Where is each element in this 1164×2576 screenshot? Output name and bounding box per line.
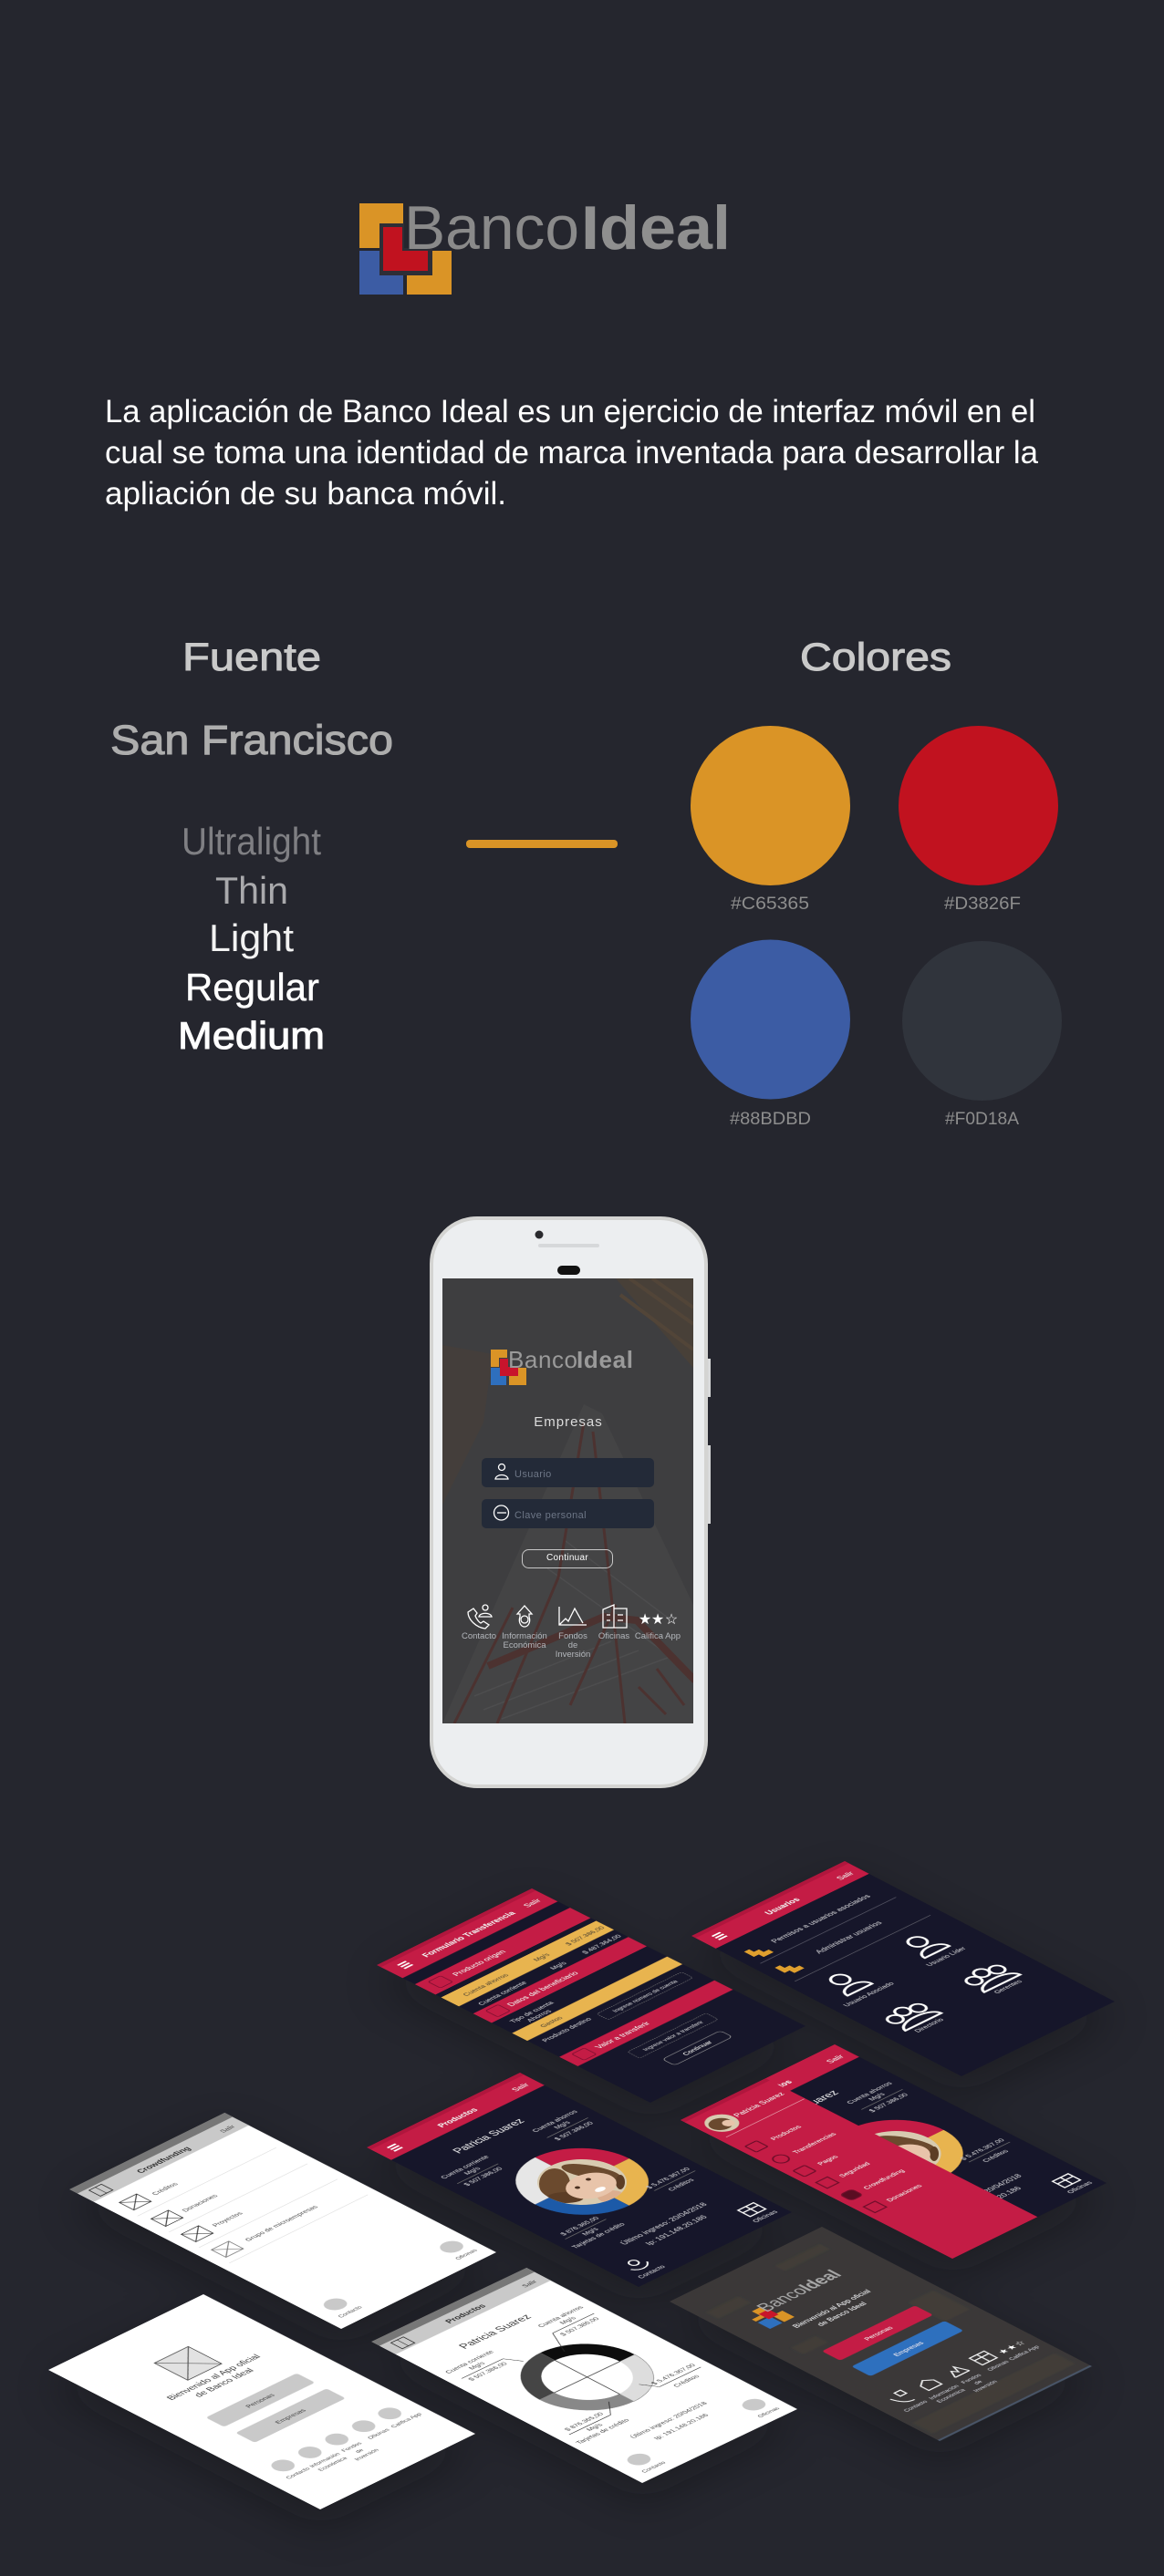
phone: logo <box>491 1346 633 1385</box>
wireframe: products chart: Cuenta ahorros <box>535 2304 586 2329</box>
screen: products dashboard: Tarjetas de crédito <box>569 2221 627 2250</box>
screen: welcome with photo background: ☆ <box>1012 2340 1028 2348</box>
heading: Fuente: Fuente <box>182 636 321 679</box>
screen: welcome with photo background: Califica App <box>1007 2344 1042 2362</box>
screen: transfer form: Datos del beneficiario <box>504 1970 580 2007</box>
screen: transfer form <box>377 1888 805 2103</box>
phone mockup: login screen <box>431 1218 711 1786</box>
screen: transfer form: Mg/s <box>547 1960 568 1971</box>
color swatches: #C65365 <box>731 895 809 914</box>
phone: shortcut icons <box>468 1605 627 1629</box>
screen: transfer form: Continuar <box>681 2040 715 2056</box>
phone: continue button: Continuar <box>546 1553 588 1563</box>
wireframe: welcome: Información <box>308 2452 343 2468</box>
screen: users: Directorio <box>912 2017 946 2033</box>
wireframe: products chart: Ip: 191.148.20.186 <box>651 2412 711 2441</box>
phone: shortcut labels: Contacto <box>462 1631 496 1641</box>
screen: welcome with photo background: de Banco Ideal <box>815 2301 868 2327</box>
color swatches: #F0D18A <box>945 1110 1019 1129</box>
screen: transfer form: Cuenta ahorros <box>461 1972 511 1997</box>
wireframe: products chart: Mg/s <box>466 2361 487 2371</box>
wireframe: products chart: $ 507.386,00 <box>557 2316 601 2337</box>
wireframe: products chart: $ 876.365,00 <box>562 2411 606 2432</box>
logo: Banco Ideal <box>359 193 731 295</box>
phone: password field <box>482 1499 654 1528</box>
screen: welcome with photo background: ★ <box>996 2347 1013 2355</box>
side menu panel <box>681 2078 1037 2259</box>
intro paragraph: cual se toma una identidad de marca inventada para desarrollar la <box>105 435 1039 471</box>
screen: welcome with photo background: Empresas <box>891 2340 926 2357</box>
screen: welcome with photo background: Inversión <box>972 2380 1000 2394</box>
phone: rating stars: ★ <box>639 1612 651 1628</box>
wireframe: products chart: Salir <box>519 2279 539 2289</box>
screen: transfer form: Tipo de cuenta <box>508 2000 556 2024</box>
screen: users: Permisos a usuarios asociados <box>769 1893 873 1944</box>
screen: products dashboard: Créditos <box>666 2178 696 2192</box>
screen: products dashboard: Patricia Suarez <box>450 2116 527 2155</box>
wireframe: products chart: Mg/s <box>584 2422 605 2432</box>
screen: welcome with photo background: Bienvenido al App oficial <box>790 2288 873 2329</box>
wireframe: welcome: Contacto <box>285 2467 312 2480</box>
wireframe: welcome: Oficinas <box>367 2427 392 2440</box>
screen: products dashboard: Ip: 191.148.20.186 <box>643 2214 709 2246</box>
screen: products dashboard: Mg/s <box>580 2226 600 2237</box>
wireframe: products chart: $ 507.386,00 <box>466 2361 509 2382</box>
screen: side menu open: Productos <box>750 2079 795 2101</box>
phone: password field: Clave personal <box>514 1510 587 1521</box>
screen shadows <box>48 1879 1116 2528</box>
wireframe: crowdfunding list: Oficinas <box>454 2248 480 2260</box>
screen: users: Gerentes <box>992 1979 1024 1995</box>
wireframe: crowdfunding list: Créditos <box>150 2181 180 2197</box>
screen: transfer form: Valor a transferir <box>593 2021 652 2050</box>
screen: side menu open: Cuenta ahorros <box>844 2081 894 2105</box>
wireframe: welcome: Fondos <box>340 2441 365 2453</box>
wireframe: welcome: Económica <box>317 2456 349 2472</box>
font name: San Francisco: San Francisco <box>110 717 393 763</box>
phone: continue button <box>522 1550 613 1568</box>
logo: Banco Ideal: Ideal <box>581 193 731 263</box>
side menu panel: Productos <box>768 2124 804 2141</box>
screen: transfer form: Producto origen <box>450 1949 508 1977</box>
screen: products dashboard: $ 507.386,00 <box>552 2120 596 2142</box>
wireframe: welcome: Inversión <box>353 2447 381 2461</box>
screen: welcome with photo background: ★ <box>1004 2343 1020 2352</box>
screen: products dashboard: Mg/s <box>462 2166 483 2176</box>
wireframe: crowdfunding list: Crowdfunding <box>134 2146 193 2175</box>
phone: shortcut labels: Oficinas <box>598 1631 629 1641</box>
wireframe: products chart: Tarjetas de crédito <box>574 2417 631 2446</box>
font weights list: Thin <box>215 869 288 912</box>
screen: users: Administrar usuarios <box>813 1919 884 1955</box>
side menu panel: Patricia Suarez <box>731 2091 786 2118</box>
accent bar <box>466 840 618 848</box>
wireframe: crowdfunding list: Contacto <box>337 2305 364 2319</box>
wireframe: crowdfunding list: Donaciones <box>180 2193 220 2213</box>
phone: shortcut labels: Inversión <box>556 1650 590 1660</box>
screen: transfer form: Producto destino <box>540 2016 594 2043</box>
screen: transfer form: Mg/s <box>531 1952 552 1962</box>
screen: transfer form: Formulario Transferencia <box>421 1909 518 1959</box>
screen: welcome with photo background: Información <box>928 2384 961 2401</box>
screen: welcome with photo background: BancoIdeal <box>753 2268 847 2314</box>
screen: welcome with photo background: Oficinas <box>986 2360 1011 2372</box>
screen: products dashboard: Productos <box>435 2106 480 2128</box>
wireframe: crowdfunding list: Grupo de microempresas <box>243 2204 320 2242</box>
screen: side menu open: $ 507.386,00 <box>867 2092 909 2114</box>
screen: side menu open: Créditos <box>981 2148 1011 2164</box>
screen: products dashboard: Último ingreso: 20/04/2018 <box>618 2201 710 2246</box>
intro paragraph <box>105 394 1039 512</box>
phone: shortcut labels: Información <box>502 1631 547 1641</box>
screen: side menu open: Mg/s <box>866 2091 887 2102</box>
phone: user field <box>482 1458 654 1487</box>
phone: logo: Ideal <box>577 1346 633 1373</box>
color swatches: #88BDBD <box>730 1110 811 1129</box>
screen: side menu open: Último ingreso: 20/04/2018 <box>932 2173 1024 2218</box>
screen: products dashboard: Cuenta ahorros <box>530 2109 579 2133</box>
font weights list: Medium <box>178 1014 325 1057</box>
wireframe: products chart <box>371 2268 797 2483</box>
screen: side menu open: Patricia Suarez <box>764 2088 842 2127</box>
screen: transfer form: $ 487.364,00 <box>579 1933 623 1955</box>
screen: products dashboard: Oficinas <box>750 2209 780 2224</box>
side menu panel: Seguridad <box>837 2161 872 2178</box>
phone: rating stars: ☆ <box>665 1612 678 1628</box>
phone: shortcut labels: Económica <box>504 1640 546 1650</box>
phone: shortcut labels: Fondos <box>558 1631 587 1641</box>
screen: users: Usuarios <box>763 1897 802 1916</box>
heading: Colores: Colores <box>800 636 951 679</box>
wireframe: welcome: Bienvenido al App oficial <box>165 2354 264 2402</box>
screen: welcome with photo background: Personas <box>862 2325 895 2342</box>
screen: transfer form: Salir <box>521 1898 544 1909</box>
screen: welcome with photo background: de <box>973 2380 985 2385</box>
screen: products dashboard: $ 507.386,00 <box>462 2166 504 2187</box>
wireframe: products chart: Productos <box>443 2302 488 2324</box>
screen: transfer form: Cuenta corriente <box>475 1980 529 2006</box>
donut chart <box>493 2330 681 2424</box>
screen: transfer form: Gastos <box>537 2015 565 2029</box>
screen: side menu open: $ 5.476.367,00 <box>958 2137 1006 2161</box>
wireframe: products chart: Mg/s <box>557 2315 578 2325</box>
screen: welcome with photo background: Económica <box>936 2388 968 2404</box>
phone: logo: Banco <box>508 1346 577 1373</box>
screen: transfer form: Ahorros <box>525 2009 554 2023</box>
screen: users: Salir <box>834 1870 856 1881</box>
wireframe: welcome: Empresas <box>273 2407 308 2425</box>
wireframe: welcome: Personas <box>244 2393 277 2409</box>
screen: users: Usuario Asociado <box>841 1981 896 2008</box>
screen: welcome with photo background: Fondos <box>960 2374 983 2385</box>
side menu panel: Donaciones <box>884 2183 924 2203</box>
font weights list: Regular <box>185 966 319 1009</box>
screen: transfer form: Ingrese número de cuenta <box>611 1980 680 2013</box>
phone: shortcut labels: Califica App <box>635 1631 681 1641</box>
wireframe: products chart: Oficinas <box>756 2406 782 2418</box>
side menu panel: Transferencias <box>790 2131 838 2155</box>
wireframe: crowdfunding list <box>69 2113 496 2329</box>
phone: subtitle: Empresas <box>534 1414 603 1430</box>
screen: side menu open: Salir <box>824 2054 847 2064</box>
wireframe: products chart: Créditos <box>671 2374 702 2388</box>
wireframe: welcome <box>48 2294 475 2509</box>
wireframe: products chart: Último ingreso: 20/04/2018 <box>629 2401 710 2439</box>
font weights list: Light <box>209 916 294 959</box>
phone: shortcut labels <box>462 1631 681 1660</box>
screen: side menu open: Ip: 191.148.20.186 <box>957 2185 1024 2218</box>
side menu panel: Crowdfunding <box>861 2168 907 2190</box>
screen: side menu open <box>681 2044 1107 2259</box>
screen: welcome with photo background <box>670 2227 1092 2441</box>
font weights list: Ultralight <box>182 820 321 863</box>
phone: rating stars <box>639 1612 678 1628</box>
screen: users: Usuario Líder <box>924 1946 969 1968</box>
screen: products dashboard: Cuenta corriente <box>438 2154 491 2180</box>
wireframe: products chart: Cuenta corriente <box>442 2349 496 2374</box>
screen: products dashboard: Contacto <box>635 2264 667 2280</box>
partial portrait photo <box>874 2131 941 2165</box>
phone: user field: Usuario <box>514 1469 552 1480</box>
screen: products dashboard: $ 876.365,00 <box>558 2216 601 2237</box>
screen: welcome with photo background: Contacto <box>902 2399 930 2413</box>
logo: Banco Ideal: Banco <box>404 193 579 263</box>
color swatches: #D3826F <box>944 895 1021 914</box>
intro paragraph: apliación de su banca móvil. <box>105 476 506 512</box>
wireframe: products chart: $ 5.476.367,00 <box>649 2363 698 2386</box>
intro paragraph: La aplicación de Banco Ideal es un ejercicio de interfaz móvil en el <box>105 394 1035 429</box>
portrait photo <box>537 2159 627 2205</box>
wireframe: welcome: Califica App <box>390 2412 424 2429</box>
wireframe: crowdfunding list: Salir <box>218 2124 238 2134</box>
wireframe: crowdfunding list: Proyectos <box>210 2210 245 2228</box>
wireframe: welcome: de <box>354 2448 366 2454</box>
wireframe: products chart: Contacto <box>640 2460 668 2474</box>
screen: users <box>691 1861 1115 2076</box>
screen: products dashboard <box>367 2073 792 2287</box>
screen: products dashboard: $ 5.476.367,00 <box>644 2167 692 2190</box>
screen: transfer form: Ingrese valor a transferir <box>641 2020 706 2052</box>
screen: transfer form: $ 507.386,00 <box>563 1925 607 1947</box>
screen: side menu open: Oficinas <box>1065 2180 1095 2195</box>
screen: products dashboard: Mg/s <box>552 2120 572 2130</box>
phone: rating stars: ★ <box>651 1612 664 1628</box>
font weights list <box>178 820 325 1057</box>
color swatches <box>691 726 1062 1129</box>
phone: shortcut labels: de <box>568 1640 577 1650</box>
wireframe: welcome: de Banco Ideal <box>192 2367 256 2399</box>
wireframe: products chart: Patricia Suarez <box>455 2312 535 2351</box>
side menu panel: Pagos <box>816 2154 840 2167</box>
screen: products dashboard: Salir <box>509 2082 532 2093</box>
